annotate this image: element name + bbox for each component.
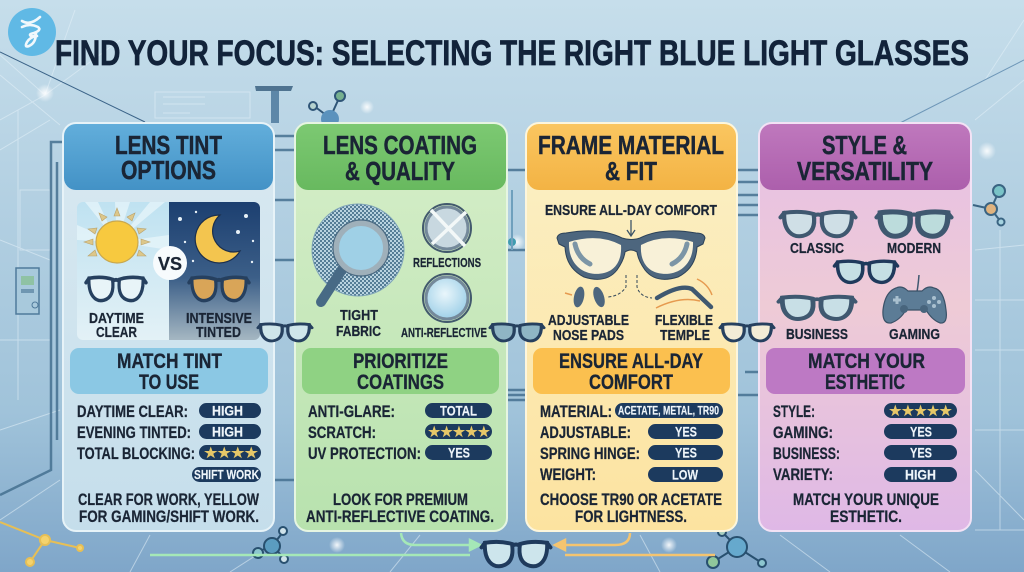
vs badge	[153, 246, 187, 280]
panel 3 ratings: WEIGHT:	[540, 466, 596, 484]
panel 3 ratings: YES	[675, 444, 697, 460]
nose pads label: NOSE PADS	[553, 328, 624, 344]
classic label: CLASSIC	[790, 241, 844, 257]
panel 2 ratings: TOTAL	[440, 402, 477, 418]
panel 1 ratings: HIGH	[212, 424, 243, 440]
molecule: bottom left teal	[253, 527, 288, 563]
panel 2 ratings: ★★★★★	[428, 424, 490, 440]
intensive tinted label: INTENSIVE	[186, 311, 252, 327]
panel 4 ratings: ★★★★★	[889, 402, 952, 418]
logo	[8, 8, 56, 56]
panel 3 heading	[527, 124, 736, 190]
panel 1 ratings: ★★★★	[204, 444, 258, 460]
panel 3 ratings: MATERIAL:	[540, 403, 612, 421]
icon: bottom glasses	[482, 542, 550, 566]
panel 3 ratings: ADJUSTABLE:	[540, 424, 631, 442]
panel: frame material and fit	[526, 123, 737, 531]
icon: large glasses	[557, 231, 705, 279]
business label: BUSINESS	[786, 327, 848, 343]
panel 1 heading: OPTIONS	[121, 155, 216, 185]
molecule: bottom right	[707, 528, 766, 568]
icon: game controller	[883, 275, 946, 323]
panel 2 ratings: YES	[448, 444, 470, 460]
panel 2 tip: ANTI-REFLECTIVE COATING.	[306, 508, 494, 526]
panel 4 heading: VERSATILITY	[797, 156, 933, 186]
panel 3 subheading: COMFORT	[589, 371, 673, 394]
icon: moon	[195, 215, 240, 263]
panel: lens tint options	[63, 123, 274, 531]
panel 3 tip	[540, 491, 722, 526]
panel 1 tip: FOR GAMING/SHIFT WORK.	[79, 508, 259, 526]
panel 2 subheading: PRIORITIZE	[353, 350, 448, 373]
molecule: bottom left yellow	[0, 522, 83, 566]
nose pads label	[548, 313, 629, 344]
panel 4 ratings: BUSINESS:	[773, 445, 840, 463]
panel 1 ratings	[77, 402, 261, 482]
panel 2 ratings	[308, 402, 492, 463]
panel 1 ratings: DAYTIME CLEAR:	[77, 403, 188, 421]
icon: connector glasses panel 2-3	[490, 324, 544, 341]
gaming label: GAMING	[889, 327, 940, 343]
panel 4 heading	[760, 124, 970, 190]
panel 4 ratings: GAMING:	[773, 424, 833, 442]
icon: magnifier over tight fabric	[312, 204, 404, 302]
panel 3 ratings: SPRING HINGE:	[540, 445, 640, 463]
daytime clear label: CLEAR	[96, 325, 137, 341]
icon: modern glasses	[876, 212, 952, 236]
flexible temple label	[655, 313, 713, 344]
intensive tinted label: TINTED	[196, 325, 241, 341]
connector: green arrows	[150, 533, 480, 555]
panel 2 heading	[296, 124, 506, 190]
illustration: daytime vs night	[77, 202, 260, 341]
panel 1 heading: LENS TINT	[115, 130, 222, 160]
panel 3 ratings: LOW	[672, 466, 699, 482]
tight fabric label: FABRIC	[336, 324, 381, 340]
intensive tinted label	[186, 311, 252, 341]
panel 1 subheading: TO USE	[139, 371, 199, 394]
panel 1 ratings: HIGH	[212, 402, 243, 418]
panel 4 heading: STYLE &	[822, 130, 907, 160]
icon: clear glasses	[86, 277, 146, 301]
panel 1 heading	[64, 124, 273, 190]
tight fabric label: TIGHT	[340, 308, 378, 324]
panel 3 tip: CHOOSE TR90 OR ACETATE	[540, 491, 722, 509]
panel 3 heading: & FIT	[605, 156, 657, 186]
panel 1 ratings: TOTAL BLOCKING:	[77, 445, 195, 463]
panel 2 subheading	[302, 348, 499, 394]
panel 4 ratings: YES	[910, 424, 932, 440]
molecule: right	[973, 185, 1005, 226]
panel 3 tip: FOR LIGHTNESS.	[575, 508, 687, 526]
panel 2 ratings: ANTI-GLARE:	[308, 403, 395, 421]
panel 3 subheading: ENSURE ALL-DAY	[559, 350, 703, 373]
panel 4 tip: MATCH YOUR UNIQUE	[793, 491, 939, 509]
icon: connector glasses panel 3-4	[720, 324, 774, 341]
panel 4 tip	[793, 491, 939, 526]
panel 3 ratings: YES	[675, 424, 697, 440]
panel 3 heading: FRAME MATERIAL	[538, 130, 724, 160]
panel 1 ratings: SHIFT WORK	[194, 468, 259, 482]
icon: nose pads	[572, 285, 607, 309]
icon: business glasses	[779, 297, 855, 319]
reflections label: REFLECTIONS	[413, 255, 481, 270]
flexible temple label: TEMPLE	[660, 328, 710, 344]
molecule: top	[309, 91, 345, 128]
tight fabric label	[336, 308, 381, 340]
panel 4 subheading: MATCH YOUR	[808, 350, 925, 373]
panel 4 subheading: ESTHETIC	[825, 371, 905, 394]
panel 1 subheading	[70, 348, 268, 394]
connector: orange arrows	[555, 533, 715, 555]
panel 2 heading: LENS COATING	[323, 130, 477, 160]
icon: reflections lens	[423, 204, 471, 252]
panel 2 heading: & QUALITY	[345, 156, 455, 186]
panel 3 subheading	[533, 348, 730, 394]
vs badge: VS	[158, 254, 182, 274]
panel: lens coating and quality	[295, 123, 507, 531]
panel 1 tip: CLEAR FOR WORK, YELLOW	[78, 491, 259, 509]
nose pads label: ADJUSTABLE	[548, 313, 629, 329]
panel 2 subheading: COATINGS	[357, 371, 444, 394]
panel 4 ratings: STYLE:	[773, 403, 815, 421]
icon: tinted glasses	[189, 277, 249, 301]
panel 4 ratings: HIGH	[905, 466, 936, 482]
anti-reflective label: ANTI-REFLECTIVE	[401, 325, 487, 340]
panel 4 ratings	[773, 402, 957, 484]
icon: classic glasses	[780, 212, 856, 236]
panel 2 tip: LOOK FOR PREMIUM	[333, 491, 468, 509]
icon: flexible temple	[565, 279, 712, 308]
panel 1 subheading: MATCH TINT	[117, 350, 222, 373]
panel 2 ratings: SCRATCH:	[308, 424, 376, 442]
icon: anti-reflective lens	[423, 274, 471, 322]
arrow: to bridge	[627, 220, 635, 236]
panel 4 tip: ESTHETIC.	[830, 508, 902, 526]
arrows: to nose pads and temple	[608, 275, 652, 298]
panel: style and versatility	[759, 123, 971, 531]
comfort label: ENSURE ALL-DAY COMFORT	[545, 203, 717, 219]
panel 4 subheading	[766, 348, 965, 394]
panel 1 tip	[78, 491, 259, 526]
flexible temple label: FLEXIBLE	[655, 313, 713, 329]
panel 3 ratings: ACETATE, METAL, TR90	[618, 406, 719, 418]
modern label: MODERN	[887, 241, 941, 257]
daytime clear label	[89, 311, 144, 341]
panel 2 tip	[306, 491, 494, 526]
panel 4 ratings: VARIETY:	[773, 466, 833, 484]
icon: connector glasses panel 1-2	[258, 324, 312, 341]
panel 3 ratings	[540, 403, 723, 484]
panel 4 ratings: YES	[910, 444, 932, 460]
panel 2 ratings: UV PROTECTION:	[308, 445, 421, 463]
daytime clear label: DAYTIME	[89, 311, 144, 327]
icon: sun	[84, 208, 150, 263]
icon: center glasses	[834, 261, 898, 282]
panel 1 ratings: EVENING TINTED:	[77, 424, 191, 442]
